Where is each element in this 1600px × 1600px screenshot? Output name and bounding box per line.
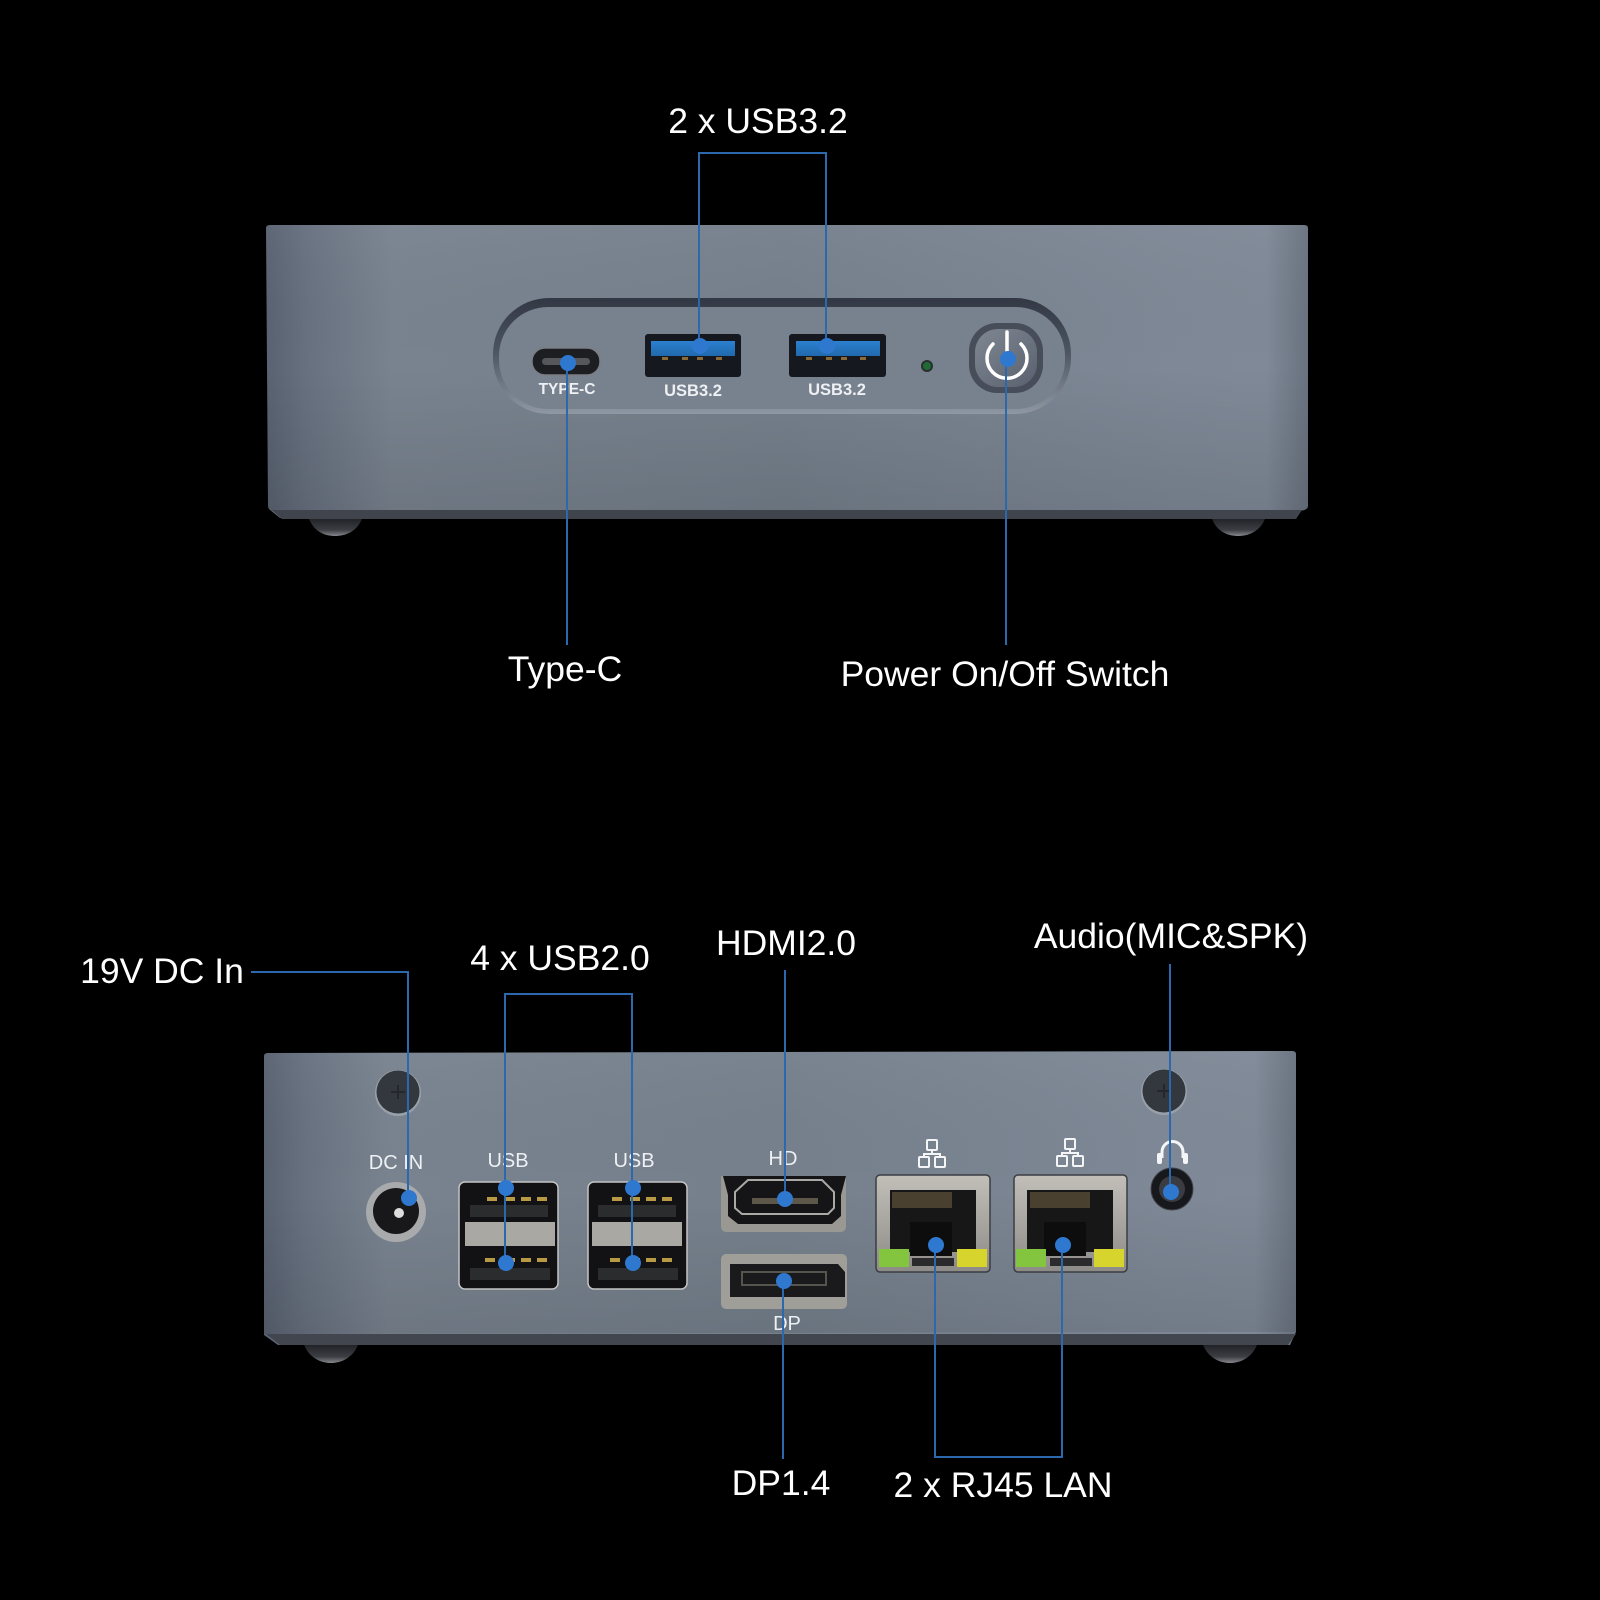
- rear body: [264, 1051, 1296, 1345]
- panel: front view mini PC: [266, 225, 1308, 536]
- callout: 19V DC In: [80, 951, 417, 1206]
- screws: [375, 1069, 1187, 1116]
- callout: HDMI2.0: HDMI2.0: [716, 923, 856, 963]
- rear feet: [303, 1342, 1258, 1363]
- icon: headphones: [1157, 1142, 1188, 1164]
- callout: 2 x USB3.2: [668, 101, 848, 354]
- USB3.2 port 2: [789, 334, 886, 399]
- callout: HDMI2.0: [716, 923, 856, 1207]
- status LED: [922, 361, 932, 371]
- callout: 4 x USB2.0: 4 x USB2.0: [470, 938, 650, 978]
- USB3.2 port 2: USB3.2: [808, 381, 866, 399]
- audio jack: [1151, 1168, 1193, 1210]
- DC IN jack: DC IN: [369, 1152, 423, 1174]
- DisplayPort port: [721, 1254, 847, 1335]
- USB3.2 port 1: [645, 334, 741, 400]
- DisplayPort port: DP: [773, 1313, 801, 1335]
- USB2.0 stack 1: [459, 1150, 558, 1289]
- USB2.0 stack 1: USB: [487, 1150, 529, 1172]
- callout: 2 x RJ45 LAN: [893, 1237, 1113, 1505]
- panel: rear view mini PC: [264, 1051, 1296, 1363]
- callout: 2 x USB3.2: 2 x USB3.2: [668, 101, 848, 141]
- power button: [969, 323, 1043, 393]
- callout: DP1.4: DP1.4: [732, 1463, 830, 1503]
- icon: network 1: [919, 1140, 945, 1167]
- HDMI port: HD: [769, 1148, 797, 1170]
- callout: Type-C: [508, 355, 622, 689]
- Type-C port: [532, 348, 600, 398]
- front port recess: [493, 298, 1071, 414]
- HDMI port: [721, 1148, 846, 1232]
- callout: 2 x RJ45 LAN: 2 x RJ45 LAN: [893, 1465, 1113, 1505]
- Type-C port: TYPE-C: [539, 381, 595, 398]
- RJ45 port 1: [876, 1175, 990, 1272]
- callout: Power On/Off Switch: [841, 351, 1169, 694]
- RJ45 port 2: [1014, 1175, 1127, 1272]
- front feet: [308, 516, 1266, 536]
- USB3.2 port 1: USB3.2: [664, 382, 722, 400]
- icon: network 2: [1057, 1139, 1083, 1166]
- callout: 19V DC In: 19V DC In: [80, 951, 244, 991]
- USB2.0 stack 2: [588, 1150, 687, 1289]
- USB2.0 stack 2: USB: [613, 1150, 655, 1172]
- callout: Power On/Off Switch: Power On/Off Switch: [841, 654, 1169, 694]
- callout: Audio(MIC&SPK): [1034, 916, 1308, 1200]
- front body: [266, 225, 1308, 519]
- DC IN jack: [366, 1152, 426, 1242]
- callout: DP1.4: [732, 1273, 830, 1503]
- callout: Audio(MIC&SPK): Audio(MIC&SPK): [1034, 916, 1308, 956]
- callout: Type-C: Type-C: [508, 649, 622, 689]
- callout: 4 x USB2.0: [470, 938, 650, 1271]
